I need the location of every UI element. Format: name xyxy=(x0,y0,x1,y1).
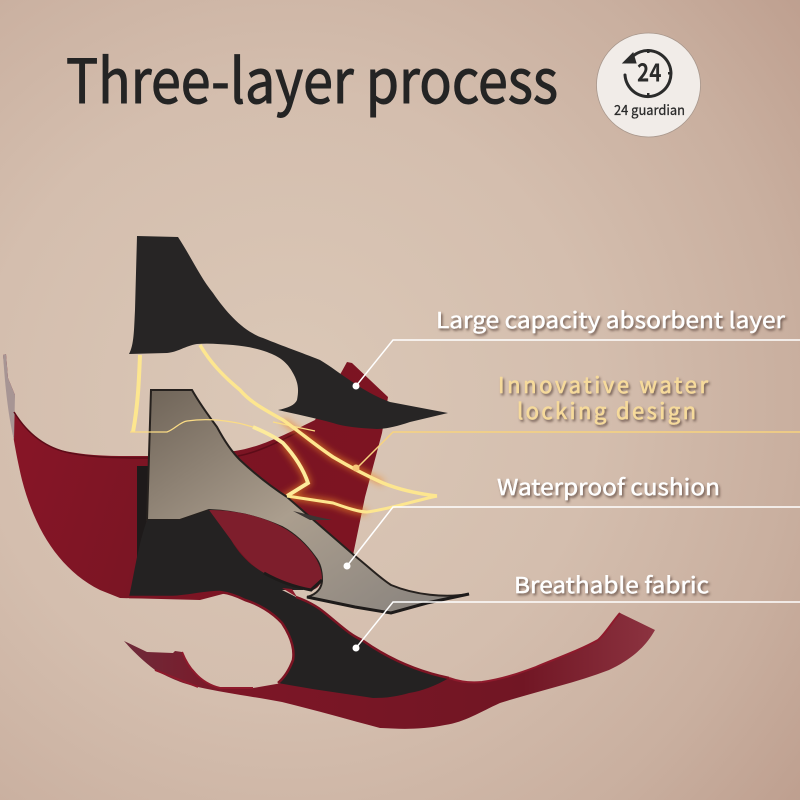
badge label: 24 guardian xyxy=(614,100,685,120)
callout: waterproof cushion xyxy=(344,470,800,570)
bottom fabric (red) xyxy=(124,613,655,729)
callout: breathable fabric xyxy=(352,568,800,652)
callout: innovative water locking design: locking design xyxy=(517,394,696,426)
glow under yellow line xyxy=(283,420,383,512)
layer: waterproof cushion (grey) xyxy=(147,390,469,613)
small red tip xyxy=(282,588,297,597)
layer: breathable fabric (black) xyxy=(129,510,449,698)
callout: breathable fabric: Breathable fabric xyxy=(514,568,709,600)
layer: large capacity absorbent (black) xyxy=(129,236,448,429)
fabric seam xyxy=(155,613,620,688)
dark centre band xyxy=(137,466,150,560)
fabric red edge xyxy=(129,592,449,683)
callout: innovative water locking design xyxy=(352,368,800,472)
callout: large capacity absorbent layer: Large capacity absorbent layer xyxy=(436,303,786,335)
badge: 24 guardian xyxy=(596,33,700,137)
small tab xyxy=(293,511,332,520)
yellow water lock outline xyxy=(130,345,437,512)
callout: innovative water locking design: Innovative water xyxy=(498,368,708,400)
outline around grey tip xyxy=(264,573,469,613)
product: back red layer xyxy=(3,354,388,600)
callout: waterproof cushion: Waterproof cushion xyxy=(497,470,720,502)
callout: large capacity absorbent layer xyxy=(352,303,800,390)
title: Three-layer process xyxy=(66,32,558,121)
icon: 24 hour clock arrow: 24 xyxy=(637,54,662,90)
grey edge of left strip xyxy=(3,354,15,440)
inner seam xyxy=(14,412,300,458)
layer: red opening xyxy=(209,510,322,590)
